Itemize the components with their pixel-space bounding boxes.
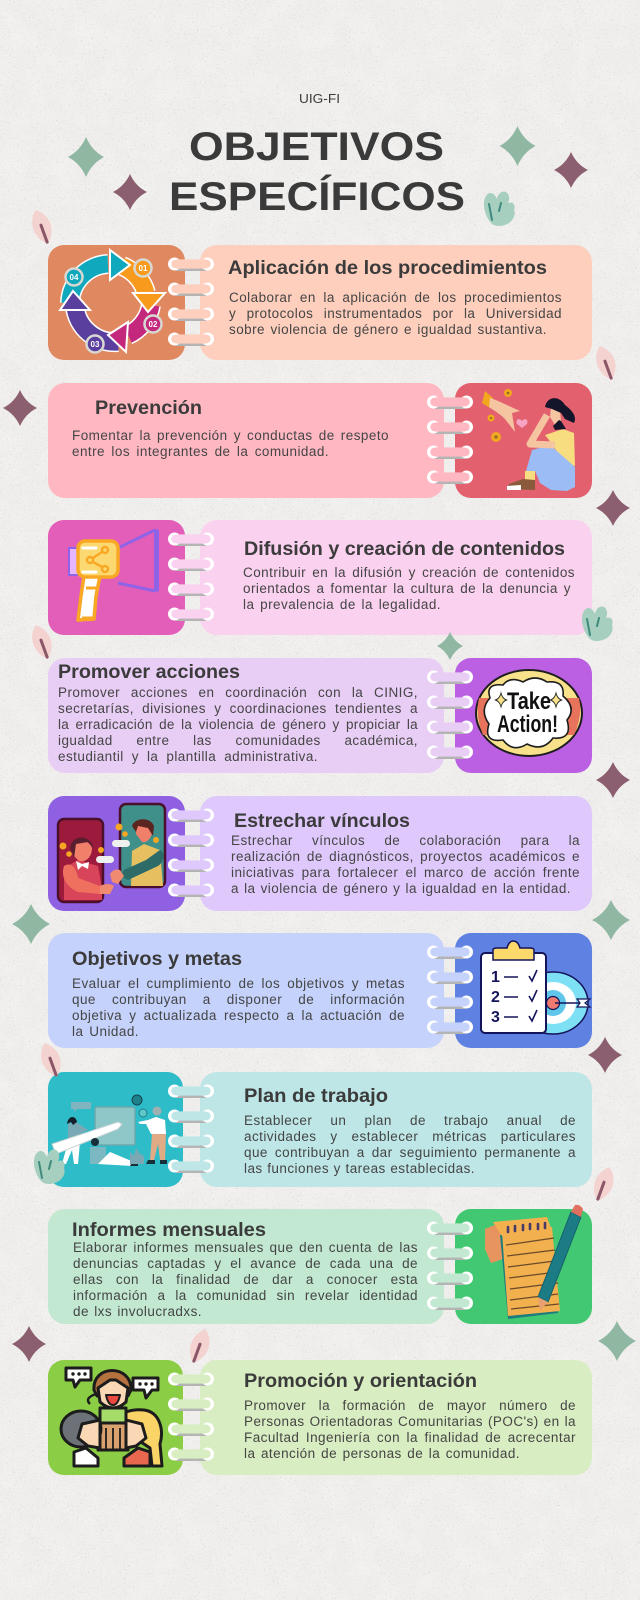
icon: cycle of four arrows bbox=[60, 250, 165, 352]
text block: Estrechar vínculos de colaboración para la bbox=[231, 833, 580, 848]
title: ESPECÍFICOS bbox=[169, 174, 465, 219]
icon: cycle of four arrows: 02 bbox=[149, 320, 158, 329]
spiral binding rings bbox=[427, 946, 473, 1034]
text block bbox=[72, 428, 389, 459]
heading: Promoción y orientación bbox=[244, 1370, 477, 1392]
text block bbox=[244, 1398, 576, 1461]
panel: Plan de trabajo bbox=[48, 1072, 592, 1187]
panel: Prevención bbox=[48, 383, 592, 498]
icon: team working with giant pencil bbox=[52, 1095, 167, 1166]
text block: Promover acciones en coordinación con la CINIG, bbox=[58, 685, 418, 700]
icon: Take Action badge bbox=[476, 670, 582, 756]
icon: cycle of four arrows: 03 bbox=[91, 340, 100, 349]
text block: iniciativas para fortalecer el marco de acción frente bbox=[231, 865, 580, 880]
text block bbox=[243, 565, 575, 612]
title: OBJETIVOS bbox=[189, 125, 444, 169]
text block: entre los integrantes de la comunidad. bbox=[72, 444, 329, 459]
text block: y protocolos instrumentados por la Universidad bbox=[229, 306, 562, 321]
text block: Elaborar informes mensuales que den cuenta de las bbox=[73, 1240, 418, 1255]
text block: realización de diagnósticos, proyectos académicos e bbox=[231, 849, 580, 864]
spiral binding rings bbox=[168, 258, 214, 346]
spiral binding rings bbox=[427, 396, 473, 484]
icon: cycle of four arrows: 04 bbox=[70, 273, 79, 282]
text block: Evaluar el cumplimiento de los objetivos y metas bbox=[72, 976, 405, 991]
text block: Colaborar en la aplicación de los procedimientos bbox=[229, 290, 562, 305]
text block: que contribuyan a dar seguimiento permanente a bbox=[244, 1145, 576, 1160]
text block: Contribuir en la difusión y creación de contenidos bbox=[243, 565, 575, 580]
icon: megaphone bbox=[69, 529, 159, 620]
spiral binding rings bbox=[168, 532, 214, 621]
text block: orientados a fomentar la cultura de la denuncia y bbox=[243, 581, 571, 596]
icon: cycle of four arrows: 01 bbox=[139, 264, 148, 273]
text block: sobre violencia de género e igualdad sustantiva. bbox=[229, 322, 547, 337]
text block: la atención de personas de la comunidad. bbox=[244, 1446, 520, 1461]
text block: Personas Orientadoras Comunitarias (POC's) en la bbox=[244, 1414, 576, 1429]
icon: notepad and pencil bbox=[485, 1205, 583, 1319]
panel: Difusión y creación de contenidos bbox=[48, 520, 592, 635]
text block: secretarías, divisiones y coordinaciones tendientes a bbox=[58, 701, 418, 716]
spiral binding rings bbox=[168, 808, 214, 897]
text block: denuncias captadas y el avance de cada una de bbox=[73, 1256, 418, 1271]
text block: Facultad Ingeniería con la finalidad de acrecentar bbox=[244, 1430, 576, 1445]
heading: Plan de trabajo bbox=[244, 1085, 388, 1107]
icon: checklist and target: 2 bbox=[491, 989, 500, 1006]
text block bbox=[72, 976, 405, 1039]
heading: Prevención bbox=[95, 397, 202, 419]
text block bbox=[244, 1113, 576, 1176]
text block bbox=[229, 290, 562, 337]
text block: estudiantil y la plantilla administrativa. bbox=[58, 749, 318, 764]
text block: que contribuyan a disponer de información bbox=[72, 992, 405, 1007]
spiral binding rings bbox=[427, 1222, 473, 1310]
spiral binding rings bbox=[168, 1372, 214, 1461]
text block: de lxs involucradxs. bbox=[73, 1304, 202, 1319]
spiral binding rings bbox=[168, 1084, 214, 1173]
heading: Informes mensuales bbox=[72, 1219, 266, 1241]
panel: Objetivos y metas bbox=[48, 933, 592, 1048]
icon: two people talking on phones bbox=[58, 804, 165, 902]
icon: checklist and target bbox=[481, 941, 590, 1034]
icon: seated sad person with helping hand bbox=[482, 389, 575, 491]
text block: a la violencia de género y la igualdad en la entidad. bbox=[231, 881, 571, 896]
icon: checklist and target: 3 bbox=[491, 1009, 500, 1026]
text block: Establecer un plan de trabajo anual de bbox=[244, 1113, 576, 1128]
heading: Estrechar vínculos bbox=[234, 810, 410, 832]
text: UIG-FI bbox=[299, 91, 340, 106]
text block bbox=[231, 833, 580, 896]
icon: checklist and target: 1 bbox=[491, 969, 500, 986]
text block bbox=[73, 1240, 418, 1319]
panel: Promoción y orientación bbox=[48, 1360, 592, 1475]
panel: Aplicación de los procedimientos bbox=[48, 245, 592, 360]
text block: Promover la formación de mayor número de bbox=[244, 1398, 576, 1413]
heading: Promover acciones bbox=[58, 661, 240, 683]
text block: igualdad entre las comunidades académica, bbox=[58, 733, 418, 748]
text block bbox=[58, 685, 418, 764]
text block: Fomentar la prevención y conductas de respeto bbox=[72, 428, 389, 443]
heading: Aplicación de los procedimientos bbox=[228, 257, 547, 279]
text block: actividades y establecer métricas particulares bbox=[244, 1129, 576, 1144]
text block: objetiva y actualizada respecto a la actuación de bbox=[72, 1008, 405, 1023]
spiral binding rings bbox=[427, 670, 473, 759]
text block: información a la comunidad sin revelar identidad bbox=[73, 1288, 418, 1303]
text block: la Unidad. bbox=[72, 1024, 139, 1039]
panel: Promover acciones bbox=[48, 658, 592, 773]
text block: ellas con la finalidad de dar a conocer esta bbox=[73, 1272, 418, 1287]
panel: Informes mensuales bbox=[48, 1204, 592, 1324]
icon: Take Action badge: Action! bbox=[497, 711, 558, 738]
panel: Estrechar vínculos bbox=[48, 796, 592, 911]
icon: group of people and speaker bbox=[61, 1368, 162, 1466]
text block: las funciones y tareas establecidas. bbox=[244, 1161, 475, 1176]
text block: la erradicación de la violencia de género y propiciar la bbox=[58, 717, 418, 732]
icon: Take Action badge: Take bbox=[507, 688, 551, 715]
heading: Difusión y creación de contenidos bbox=[244, 538, 565, 560]
title bbox=[169, 125, 465, 219]
heading: Objetivos y metas bbox=[72, 948, 242, 970]
text block: la prevalencia de la legalidad. bbox=[243, 597, 441, 612]
